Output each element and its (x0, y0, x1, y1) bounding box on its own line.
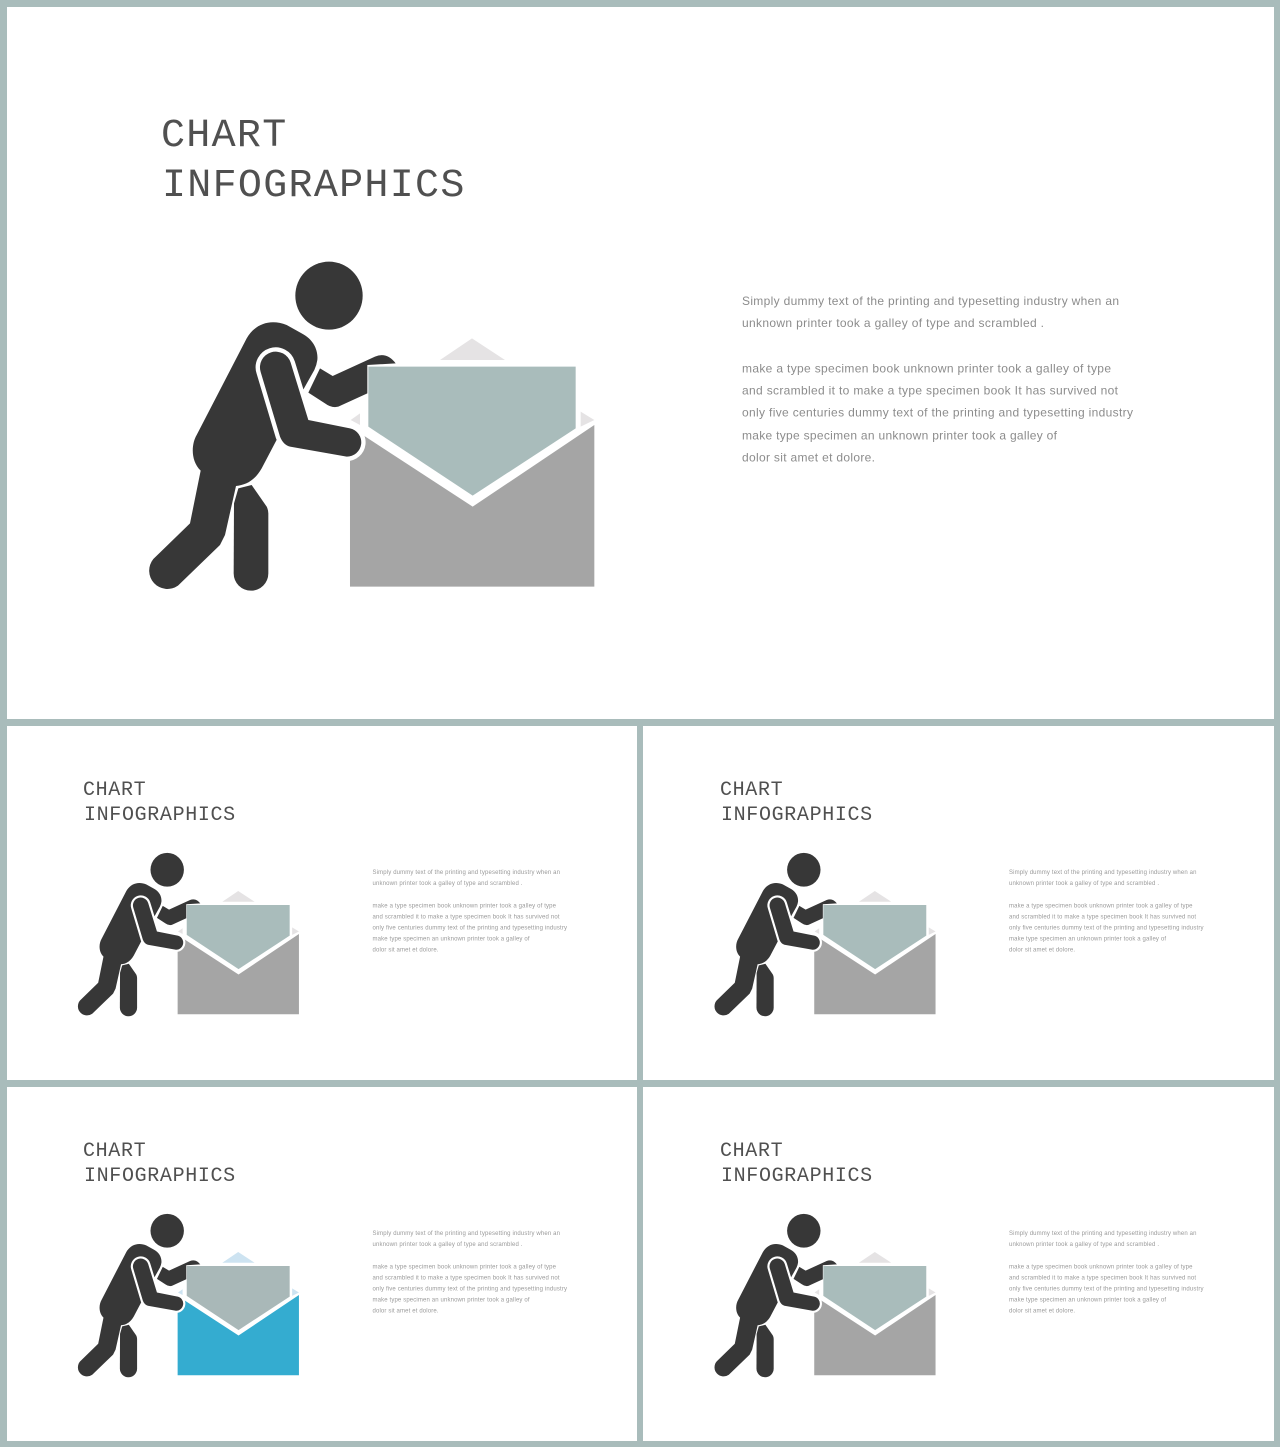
title: CHART (83, 779, 146, 802)
text block: and scrambled it to make a type specimen book It has survived not (372, 914, 560, 920)
text block: make type specimen an unknown printer took a galley of (1009, 937, 1166, 943)
text block: unknown printer took a galley of type and scrambled . (1009, 1242, 1159, 1248)
title: INFOGRAPHICS (721, 804, 873, 827)
text block (372, 870, 567, 954)
text block: dolor sit amet et dolore. (1009, 1309, 1075, 1315)
panel: slide 2 (7, 726, 637, 1080)
text block: dolor sit amet et dolore. (372, 948, 439, 954)
text block: only five centuries dummy text of the printing and typesetting industry (372, 926, 567, 932)
text block: make a type specimen book unknown printer took a galley of type (742, 361, 1111, 375)
icon: person opening envelope (715, 853, 936, 1016)
title: INFOGRAPHICS (162, 164, 466, 209)
title: CHART (720, 1140, 783, 1163)
text block: only five centuries dummy text of the printing and typesetting industry (372, 1286, 567, 1292)
text block (1009, 1231, 1204, 1315)
text block: make type specimen an unknown printer took a galley of (1009, 1298, 1166, 1304)
text block: make a type specimen book unknown printer took a galley of type (372, 1264, 557, 1270)
text block: and scrambled it to make a type specimen book It has survived not (372, 1276, 560, 1282)
title: INFOGRAPHICS (84, 1165, 236, 1188)
panel: slide 3 (643, 726, 1274, 1080)
text block: unknown printer took a galley of type and scrambled . (1009, 881, 1159, 887)
icon: person opening envelope (715, 1214, 936, 1377)
text block: dolor sit amet et dolore. (372, 1309, 439, 1315)
icon: person opening envelope (78, 853, 299, 1016)
text block: make a type specimen book unknown printer took a galley of type (372, 904, 557, 910)
text block: dolor sit amet et dolore. (742, 450, 875, 464)
text block: and scrambled it to make a type specimen book It has survived not (1009, 914, 1196, 920)
title: INFOGRAPHICS (84, 804, 236, 827)
panel: slide 4 (blue envelope) (7, 1087, 637, 1441)
text block: dolor sit amet et dolore. (1009, 948, 1075, 954)
text block: only five centuries dummy text of the printing and typesetting industry (742, 406, 1133, 420)
text block: make type specimen an unknown printer took a galley of (742, 428, 1058, 442)
icon: person opening blue envelope (78, 1214, 299, 1377)
text block: only five centuries dummy text of the printing and typesetting industry (1009, 1286, 1204, 1292)
text block (1009, 870, 1204, 954)
text block: Simply dummy text of the printing and typesetting industry when an (372, 870, 560, 876)
text block: unknown printer took a galley of type and scrambled . (742, 316, 1044, 330)
title: CHART (83, 1140, 146, 1163)
text block (372, 1231, 567, 1315)
title: CHART (161, 114, 288, 159)
text block: make a type specimen book unknown printer took a galley of type (1009, 1264, 1193, 1270)
text block: Simply dummy text of the printing and typesetting industry when an (372, 1231, 560, 1237)
icon: person opening envelope (149, 262, 594, 591)
text block: Simply dummy text of the printing and typesetting industry when an (1009, 1231, 1196, 1237)
text block: make type specimen an unknown printer took a galley of (372, 937, 530, 943)
title: CHART (720, 779, 783, 802)
text block (742, 294, 1133, 464)
text block: make a type specimen book unknown printer took a galley of type (1009, 904, 1193, 910)
panel: main slide (7, 7, 1274, 719)
text block: only five centuries dummy text of the printing and typesetting industry (1009, 926, 1204, 932)
text block: and scrambled it to make a type specimen book It has survived not (1009, 1276, 1196, 1282)
panel: slide 5 (643, 1087, 1274, 1441)
text block: unknown printer took a galley of type and scrambled . (372, 1242, 523, 1248)
text block: Simply dummy text of the printing and typesetting industry when an (1009, 870, 1196, 876)
text block: unknown printer took a galley of type and scrambled . (372, 881, 523, 887)
text block: Simply dummy text of the printing and typesetting industry when an (742, 294, 1119, 308)
text block: make type specimen an unknown printer took a galley of (372, 1298, 530, 1304)
title: INFOGRAPHICS (721, 1165, 873, 1188)
text block: and scrambled it to make a type specimen book It has survived not (742, 383, 1119, 397)
